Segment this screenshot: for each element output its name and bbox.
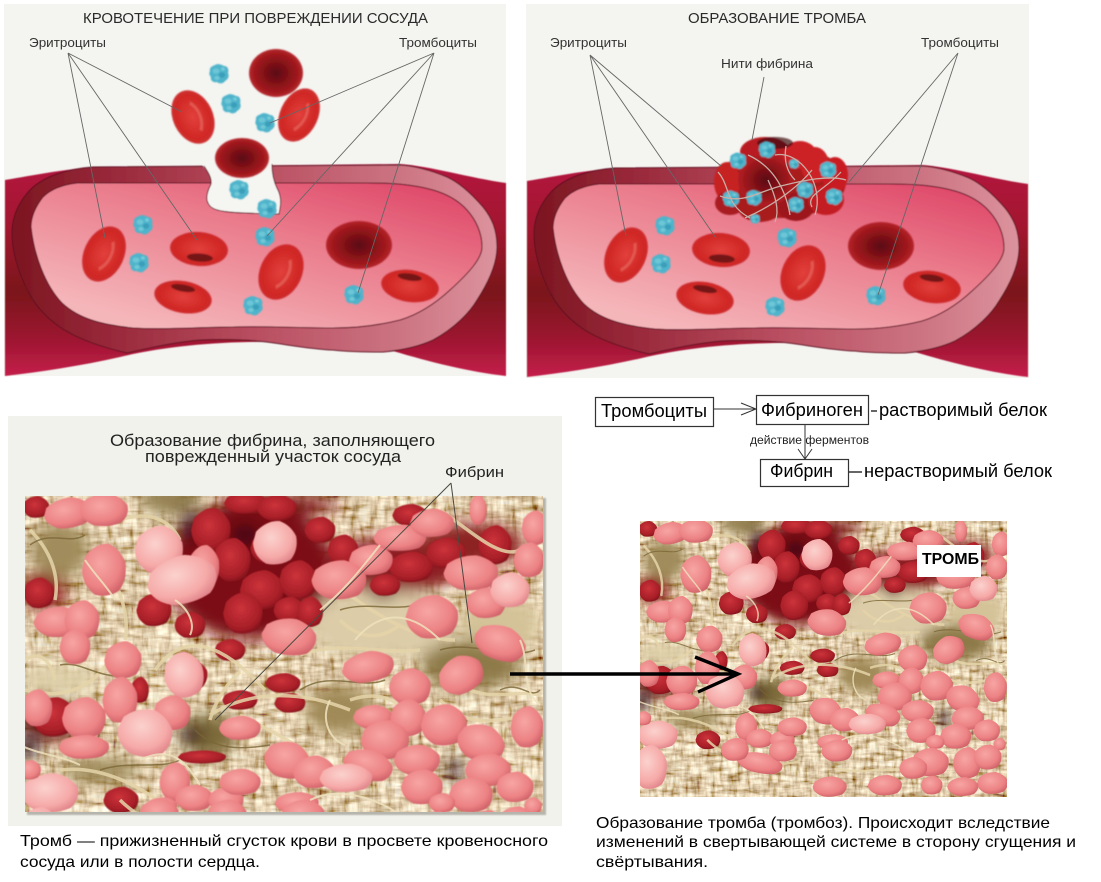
flow diagram: platelets to fibrin bbox=[596, 396, 1052, 486]
title: ОБРАЗОВАНИЕ ТРОМБА bbox=[688, 10, 866, 27]
heading bbox=[110, 431, 435, 466]
label: fibrin threads: Нити фибрина bbox=[721, 56, 814, 71]
caption: thrombosis: изменений в свертывающей системе в сторону сгущения и bbox=[596, 834, 1076, 851]
label: thrombus: ТРОМБ bbox=[922, 551, 979, 568]
fibrin strands beneath cells bbox=[25, 510, 540, 850]
dark crevices bbox=[14, 509, 463, 784]
leader lines bbox=[590, 53, 958, 295]
label: erythrocytes: Эритроциты bbox=[29, 35, 106, 50]
leader lines bbox=[68, 53, 434, 293]
arrow: fibrinogen to fibrin bbox=[798, 424, 812, 459]
leader lines: fibrin bbox=[215, 483, 472, 720]
arrow: fibrin to thrombus bbox=[510, 657, 738, 692]
vessel cross-section bbox=[5, 160, 506, 376]
label: erythrocytes: Эритроциты bbox=[550, 35, 627, 50]
box: fibrinogen bbox=[756, 396, 868, 424]
vessel cross-section bbox=[527, 165, 1028, 377]
label: platelets: Тромбоциты bbox=[921, 35, 999, 50]
box: fibrinogen: Фибриноген bbox=[761, 400, 863, 420]
thin dark and pale fibres bbox=[30, 535, 540, 770]
note: insoluble protein: нерастворимый белок bbox=[864, 461, 1052, 481]
box: platelets bbox=[596, 398, 714, 426]
photo shadow bbox=[27, 498, 546, 815]
cells escaping through wound bbox=[163, 49, 328, 218]
caption: thrombosis: свёртывания. bbox=[596, 854, 708, 871]
box: platelets: Тромбоциты bbox=[601, 401, 707, 421]
caption: thrombosis bbox=[596, 815, 1076, 871]
heading: Образование фибрина, заполняющего bbox=[110, 431, 435, 450]
panel: thrombus formation bbox=[526, 4, 1029, 378]
label: platelets: Тромбоциты bbox=[399, 35, 477, 50]
blood clot with fibrin threads bbox=[714, 137, 848, 224]
title: КРОВОТЕЧЕНИЕ ПРИ ПОВРЕЖДЕНИИ СОСУДА bbox=[83, 10, 428, 27]
box: fibrin bbox=[760, 460, 848, 486]
box: fibrin: Фибрин bbox=[770, 461, 833, 481]
surface fibrin strands bbox=[20, 545, 540, 815]
cells inside the vessel bbox=[74, 215, 441, 318]
caption: thrombus definition: сосуда или в полости сердца. bbox=[20, 854, 260, 871]
micrograph: red cells and fibrin mesh bbox=[25, 496, 543, 812]
panel: fibrin formation bbox=[8, 416, 562, 826]
caption: thrombus definition: Тромб — прижизненный сгусток крови в просвете кровеносного bbox=[20, 833, 548, 850]
panel: bleeding at vessel injury bbox=[4, 4, 506, 376]
caption: thrombosis: Образование тромба (тромбоз). Происходит вследствие bbox=[596, 815, 1050, 832]
arrow: platelets to fibrinogen bbox=[713, 403, 756, 415]
cells inside the vessel bbox=[596, 216, 963, 319]
label: fibrin: Фибрин bbox=[445, 464, 504, 481]
note: enzyme action: действие ферментов bbox=[750, 433, 869, 447]
caption: thrombus definition bbox=[20, 833, 548, 871]
heading: поврежденный участок сосуда bbox=[145, 447, 402, 466]
note: soluble protein: растворимый белок bbox=[879, 400, 1047, 420]
micrograph: thrombus bbox=[632, 514, 1012, 797]
label: thrombus bbox=[917, 545, 981, 577]
